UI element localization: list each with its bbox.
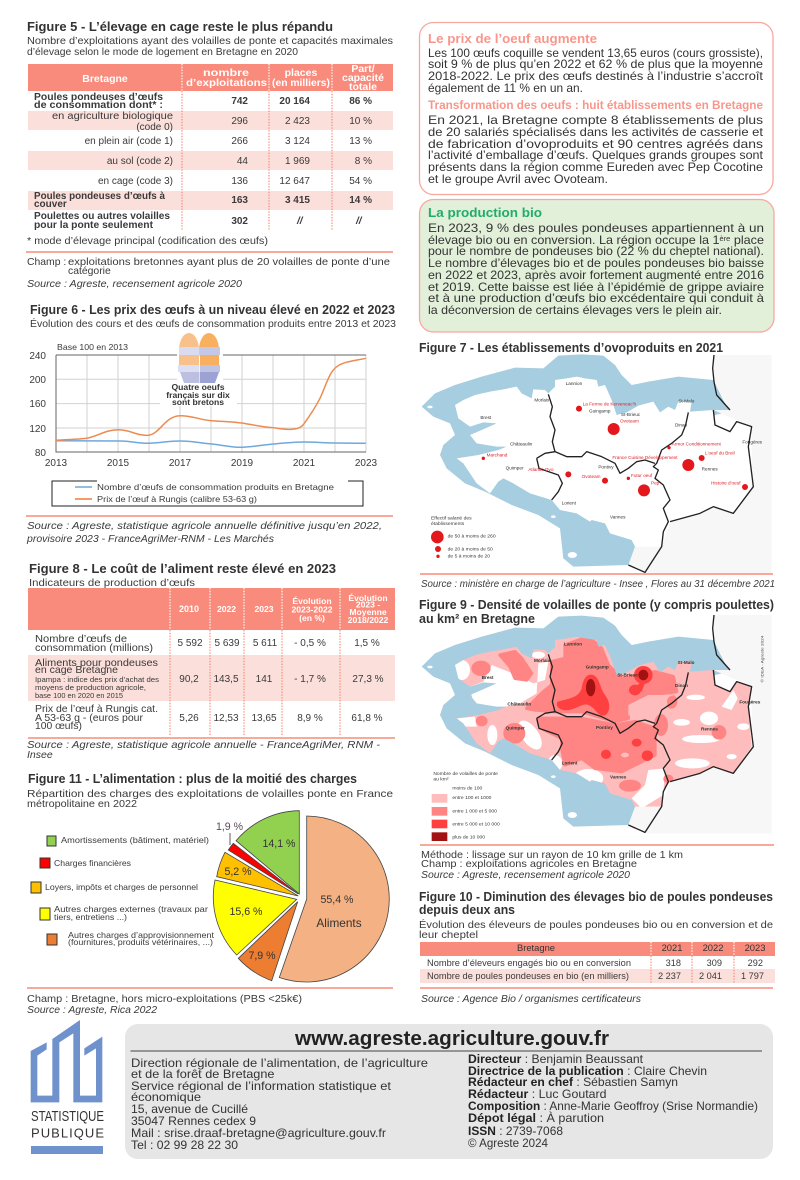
text block: publisher address: Direction régionale de l’alimentation, de l’agriculture xyxy=(131,1056,428,1070)
table: figure 5: Part/ xyxy=(351,63,375,75)
panel: egg price callout xyxy=(420,22,773,194)
table: figure 8: Ipampa : indice des prix d’achat des xyxy=(35,675,159,684)
text block: egg processing: et le groupe Avril avec Ovoteam. xyxy=(428,172,608,186)
credit: © IDEA - Agreste 2024 xyxy=(761,636,765,682)
table: figure 8: (en %) xyxy=(299,613,325,623)
table: figure 5: (code 0) xyxy=(136,122,173,133)
legend: charge categories: Amortissements (bâtiment, matériel) xyxy=(61,835,209,845)
city names: Morlaix xyxy=(534,398,550,403)
pie chart: charge breakdown: 55,4 % xyxy=(321,894,354,906)
line chart: prices and production: 2017 xyxy=(169,458,192,469)
panel: figure 11 xyxy=(27,771,393,1016)
legend: charge categories: Loyers, impôts et charges de personnel xyxy=(45,882,198,892)
text block: organic production: la déconversion de certains élevages vers le plein air. xyxy=(428,303,722,317)
text block: figure 5 source: Champ : xyxy=(27,257,66,268)
line chart: prices and production: 2015 xyxy=(107,458,130,469)
table: figure 5: 86 % xyxy=(349,96,372,107)
table: figure 8: 141 xyxy=(256,674,273,685)
table: figure 8: 8,9 % xyxy=(297,713,323,724)
heading: figure 10 xyxy=(419,889,773,917)
legend: density classes: entre 100 et 1000 xyxy=(452,795,492,801)
text block: egg processing: l’activité d’emballage d’œufs. Quelques grands groupes sont xyxy=(428,148,764,162)
city names: Fougères xyxy=(742,439,763,444)
text block: figure 9 method and source: Champ : exploitations agricoles en Bretagne xyxy=(421,859,637,870)
line chart: prices and production: 240 xyxy=(29,351,46,362)
map: layer hen density xyxy=(422,615,772,841)
table: figure 8: Évolution xyxy=(348,593,388,603)
table: figure 5: Poulettes ou autres volailles xyxy=(34,211,170,222)
panel: organic production callout xyxy=(420,200,774,332)
table: figure 8: 2023 xyxy=(254,604,274,614)
table: figure 5: pour la ponte seulement xyxy=(34,220,154,231)
city names: St-Brieuc xyxy=(621,412,641,417)
legend: density classes: entre 5 000 et 10 000 xyxy=(452,822,500,828)
table: figure 8: 13,65 xyxy=(251,713,277,724)
city names: Lorient xyxy=(562,761,578,766)
panel: figure 8 xyxy=(27,561,395,761)
table: figure 5: 1 969 xyxy=(285,156,310,167)
text block: editorial credits: ISSN : 2739-7068 xyxy=(468,1124,563,1138)
pie chart: charge breakdown: 7,9 % xyxy=(248,950,276,962)
text block: figure 5 subtitle: Nombre d’exploitations ayant des volailles de ponte et capacités maximales xyxy=(27,36,393,47)
table: figure 5: places xyxy=(285,67,317,79)
pie chart: charge breakdown: 5,2 % xyxy=(224,866,252,878)
table: figure 8: 2022 xyxy=(217,604,236,614)
text block: egg price: Les 100 œufs coquille se vendent 13,65 euros (cours grossiste), xyxy=(428,46,763,60)
legend: workforce: de 5 à moins de 20 xyxy=(448,554,490,560)
text block: organic production xyxy=(428,221,764,317)
density areas xyxy=(455,636,752,806)
text block: table footnote: * mode d’élevage principal (codification des œufs) xyxy=(27,236,268,247)
line: eggs produced in Brittany xyxy=(56,441,366,447)
city names: Dinan xyxy=(675,423,688,428)
legend: workforce: de 50 à moins de 260 xyxy=(448,534,496,540)
table: figure 8: 61,8 % xyxy=(351,713,383,724)
table: figure 8: 5 639 xyxy=(214,638,240,649)
table: figure 5: au sol (code 2) xyxy=(107,156,173,167)
table: figure 5: 136 xyxy=(231,176,248,187)
text block: figure 5 subtitle: d’élevage selon le mode de logement en Bretagne en 2020 xyxy=(27,47,298,58)
line chart: prices and production: 2023 xyxy=(355,458,378,469)
logo: Statistique publique xyxy=(31,1020,104,1154)
line chart: prices and production: 80 xyxy=(35,448,46,459)
city names: Dinan xyxy=(675,683,688,688)
table: figure 8: 90,2 xyxy=(179,674,199,685)
table: figure 5: 266 xyxy=(231,136,248,147)
panel: figure 10 xyxy=(419,889,775,1005)
text block: figure 6 subtitle: Évolution des cours et des œufs de consommation produits entre 2013 et 2023 xyxy=(30,317,396,330)
city names: St-Malo xyxy=(678,660,695,665)
table: figure 8: 100 œufs) xyxy=(35,721,82,732)
text block: editorial credits: Dépot légal : À parution xyxy=(468,1111,604,1125)
line chart: prices and production: 120 xyxy=(29,424,46,435)
text block: egg processing: présents dans la région comme Eureden avec Pep Cocotine xyxy=(428,160,763,174)
table: figure 10: 2021 xyxy=(662,942,682,953)
city names: Quimper xyxy=(506,726,525,731)
text block: figure 8 source: Source : Agreste, statistique agricole annuelle - FranceAgriMer, RNM - xyxy=(27,739,381,751)
city names: Morlaix xyxy=(534,658,551,663)
table: figure 5: 742 xyxy=(231,96,248,107)
legend: workforce xyxy=(431,515,496,560)
table: figure 8: Évolution xyxy=(292,596,332,606)
text block: publisher address: Service régional de l’information statistique et xyxy=(131,1079,392,1093)
table: figure 5: 3 415 xyxy=(285,195,310,206)
table: figure 10: 318 xyxy=(666,958,681,968)
pie chart: charge breakdown xyxy=(213,811,389,982)
table: figure 5: 3 124 xyxy=(285,136,310,147)
panel: figure 9 xyxy=(419,597,774,881)
legend: charge categories: Charges financières xyxy=(54,858,131,868)
text block: figure 8 subtitle: Indicateurs de production d’œufs xyxy=(29,578,195,589)
line chart: prices and production: Base 100 en 2013 xyxy=(57,342,128,352)
legend: workforce: établissements xyxy=(431,521,465,527)
city names: Lannion xyxy=(566,381,583,386)
establishment names: Histoire d'oeuf xyxy=(711,480,741,485)
table: figure 5: 10 % xyxy=(349,116,372,127)
text block: organic production: Le nombre d’élevages bio et de poules pondeuses bio baisse xyxy=(428,256,764,270)
text block: organic production: élevage bio ou en conversion. La région occupe la 1 xyxy=(428,233,701,247)
heading: figure 7: Figure 7 - Les établissements d’ovoproduits en 2021 xyxy=(419,340,723,355)
city names: Lorient xyxy=(562,500,577,505)
table: figure 5: 14 % xyxy=(349,195,372,206)
legend: figure 6: Prix de l’œuf à Rungis (calibre 53-63 g) xyxy=(97,494,257,504)
city names: St-Malo xyxy=(678,399,695,404)
text block: organic production: ère xyxy=(720,236,730,243)
table: figure 8: 2018/2022 xyxy=(348,615,389,625)
text block: organic production: et 2019. Cette baisse est liée à l’épidémie de grippe aviaire xyxy=(428,280,764,294)
legend: workforce: de 20 à moins de 50 xyxy=(448,547,493,553)
table: figure 8: 5,26 xyxy=(179,713,199,724)
heading: figure 11: Figure 11 - L’alimentation : plus de la moitié des charges xyxy=(28,771,357,786)
table: figure 8: Moyenne xyxy=(349,607,387,617)
pie chart: charge breakdown: 1,9 % xyxy=(216,821,244,833)
city names xyxy=(482,642,761,780)
legend: charge categories: tiers, entretiens ...) xyxy=(54,912,127,922)
legend: density classes: entre 1 000 et 5 000 xyxy=(452,808,497,814)
text block: figure 5 source xyxy=(27,257,390,290)
text block: figure 9 method and source xyxy=(421,850,683,881)
panel: figure 7 xyxy=(419,340,775,590)
city names: Guingamp xyxy=(586,664,609,669)
table: figure 8: 2023 - xyxy=(356,600,380,610)
table: figure 5: 8 % xyxy=(355,156,372,167)
table: figure 5: 13 % xyxy=(349,136,372,147)
table: figure 10: Nombre d’éleveurs engagés bio ou en conversion xyxy=(427,958,631,968)
legend: charge categories: Autres charges d’approvisionnement xyxy=(68,930,215,940)
table: figure 10: Bretagne xyxy=(517,942,555,953)
line chart: prices and production: 2019 xyxy=(231,458,254,469)
establishment names: Armor Conditionnement xyxy=(672,441,722,446)
table: figure 10: 2023 xyxy=(745,942,765,953)
text block: figure 5 subtitle xyxy=(27,36,393,58)
panel: figure 5 xyxy=(26,19,393,290)
table: figure 5: 296 xyxy=(231,116,248,127)
table: figure 8: 5 611 xyxy=(253,638,278,649)
text block: egg price: 2018-2022. Le prix des œufs destinés à l’industrie s’accroît xyxy=(428,69,764,83)
text block: egg processing: de 20 salariés spécialisés dans les activités de casserie et xyxy=(428,125,764,139)
establishment names: Ovoteam xyxy=(620,419,639,424)
table: figure 5 xyxy=(28,63,393,231)
city names: Rennes xyxy=(701,727,718,732)
city names: Guingamp xyxy=(589,409,611,414)
table: figure 5: en agriculture biologique xyxy=(52,111,173,122)
table: figure 8: 1,5 % xyxy=(354,638,380,649)
heading: figure 9: au km² en Bretagne xyxy=(419,611,535,626)
text block: figure 9 method and source: Source : Agreste, recensement agricole 2020 xyxy=(421,869,630,881)
table: figure 10: 2 237 xyxy=(658,971,681,981)
table: figure 5: 2 423 xyxy=(285,116,310,127)
table: figure 5: totale xyxy=(349,81,377,93)
text block: figure 10 subtitle: leur cheptel xyxy=(419,930,478,941)
establishment dots xyxy=(482,406,748,496)
text block: editorial credits: © Agreste 2024 xyxy=(468,1136,548,1150)
table: figure 10: 1 797 xyxy=(741,971,764,981)
text block: egg price xyxy=(428,46,764,95)
text block: publisher address: 35047 Rennes cedex 9 xyxy=(131,1114,256,1128)
text block: editorial credits: Composition : Anne-Marie Geoffroy (Srise Normandie) xyxy=(468,1099,758,1113)
icon: egg cartons callout: français sur dix xyxy=(166,390,230,400)
table: figure 5: capacité xyxy=(342,72,384,84)
line chart: prices and production: 200 xyxy=(29,375,46,386)
text block: figure 5 source: Source : Agreste, recensement agricole 2020 xyxy=(27,278,242,290)
text block: organic production: en 2022 et 2023, après avoir fortement augmenté entre 2016 xyxy=(428,268,764,282)
establishment names: Marchand xyxy=(487,452,508,457)
text block: figure 6 source xyxy=(26,520,382,545)
table: figure 5: // xyxy=(296,216,304,227)
text block: editorial credits: Directrice de la publication : Claire Chevin xyxy=(468,1064,707,1078)
heading: figure 10: depuis deux ans xyxy=(419,902,515,917)
city names: Brest xyxy=(480,415,492,420)
table: figure 5: 12 647 xyxy=(279,176,310,187)
line chart: prices and production: 2013 xyxy=(45,458,68,469)
table: figure 8: Prix de l’œuf à Rungis cat. xyxy=(35,704,158,715)
table: figure 5: Poules pondeuses d’œufs xyxy=(34,92,163,103)
table: figure 5: Bretagne xyxy=(82,73,128,85)
establishment names: Ovoteam xyxy=(582,474,601,479)
table: figure 8: 2010 xyxy=(179,604,199,614)
legend: charge categories xyxy=(31,835,215,947)
text block: publisher address: Tel : 02 99 28 22 30 xyxy=(131,1138,238,1152)
text block: organic production: place xyxy=(730,233,764,247)
text block: figure 6 source: Source : Agreste, statistique agricole annuelle définitive jusqu’en 2022, xyxy=(27,520,382,532)
table: figure 8: base 100 en 2020 en 2015 xyxy=(35,691,123,700)
establishment names: Pep xyxy=(651,480,660,485)
text block: figure 6 source: provisoire 2023 - FranceAgriMer-RNM - Les Marchés xyxy=(26,533,275,545)
table: figure 5: nombre xyxy=(203,67,249,79)
text block: editorial credits: Directeur : Benjamin Beaussant xyxy=(468,1052,644,1066)
heading: egg price: Le prix de l’oeuf augmente xyxy=(428,32,597,46)
table: figure 8: 143,5 xyxy=(213,674,239,685)
table: figure 5: d’exploitations xyxy=(186,77,267,89)
text block: editorial credits: Rédacteur en chef : Sébastien Samyn xyxy=(468,1075,678,1089)
table: figure 5: couver xyxy=(34,199,67,210)
panel: figure 6 xyxy=(26,302,396,545)
text block: figure 11 subtitle xyxy=(27,789,393,810)
table: figure 10 xyxy=(420,942,775,984)
text block: egg processing: En 2021, la Bretagne compte 8 établissements de plus xyxy=(428,113,763,127)
pie chart: charge breakdown: Aliments xyxy=(316,916,362,930)
legend: density classes: moins de 100 xyxy=(452,785,482,791)
text block: figure 8 source: Insee xyxy=(27,749,53,761)
establishment names xyxy=(487,402,741,485)
icon: egg cartons callout xyxy=(160,333,237,407)
city names: Brest xyxy=(482,675,494,680)
text block: egg price: également de 11 % en un an. xyxy=(428,81,583,95)
text block: egg price: soit 9 % de plus qu’en 2022 et 62 % de plus que la moyenne xyxy=(428,57,763,71)
legend: density classes: au km² xyxy=(433,776,449,782)
heading: figure 8: Figure 8 - Le coût de l’aliment reste élevé en 2023 xyxy=(29,561,336,576)
text block: organic production: En 2023, 9 % des poules pondeuses appartiennent à un xyxy=(428,221,764,235)
text block: figure 9 method and source: Méthode : lissage sur un rayon de 10 km grille de 1 km xyxy=(421,850,683,861)
text block: figure 7 source: Source : ministère en charge de l’agriculture - Insee , Flores au 31 décembre 2021 xyxy=(421,578,775,590)
logo: Statistique publique: PUBLIQUE xyxy=(31,1126,104,1140)
table: figure 5: 54 % xyxy=(349,176,372,187)
pie chart: charge breakdown: 15,6 % xyxy=(230,906,263,918)
establishment names: Futur oeuf xyxy=(631,473,653,478)
panel: footer imprint xyxy=(125,1024,773,1159)
text block: figure 10 subtitle xyxy=(419,918,773,941)
legend: charge categories: Autres charges externes (travaux par xyxy=(54,904,208,914)
table: figure 8: 5 592 xyxy=(177,638,203,649)
legend: figure 6 xyxy=(52,481,363,506)
table: figure 5: 163 xyxy=(231,195,248,206)
text block: publisher address: Mail : srise.draaf-bretagne@agriculture.gouv.fr xyxy=(131,1126,386,1140)
city names: Pontivy xyxy=(596,725,613,730)
legend: density classes: Nombre de volailles de ponte xyxy=(433,771,498,777)
heading: organic production: La production bio xyxy=(428,206,542,220)
legend: density classes xyxy=(432,771,500,841)
table: figure 10: 292 xyxy=(748,958,763,968)
table: figure 8: - 0,5 % xyxy=(294,638,326,649)
table: figure 10: 309 xyxy=(707,958,722,968)
city names: Vannes xyxy=(610,775,627,780)
table: figure 5: de consommation dont* : xyxy=(34,100,163,111)
table: figure 8: 2023-2022 xyxy=(291,604,333,614)
heading: figure 9 xyxy=(419,597,774,626)
table: figure 8: - 1,7 % xyxy=(294,674,326,685)
table: figure 8: Nombre d’œufs de xyxy=(35,634,127,645)
city names: Châteaulin xyxy=(507,702,531,707)
logo: Statistique publique: STATISTIQUE xyxy=(31,1108,104,1125)
text block: egg processing xyxy=(428,113,764,186)
text block: figure 11 source xyxy=(27,994,302,1016)
heading: figure 6: Figure 6 - Les prix des œufs à un niveau élevé en 2022 et 2023 xyxy=(30,302,395,317)
text block: figure 11 source: Champ : Bretagne, hors micro-exploitations (PBS <25k€) xyxy=(27,994,302,1005)
table: figure 5: (en milliers) xyxy=(272,77,330,89)
text block: organic production: pour le nombre de pondeuses bio (22 % du cheptel national). xyxy=(428,244,764,258)
table: figure 10: 2022 xyxy=(703,942,723,953)
map: egg product plants xyxy=(422,354,772,573)
heading: figure 10: Figure 10 - Diminution des élevages bio de poules pondeuses xyxy=(419,889,773,904)
table: figure 8: moyens de production agricole, xyxy=(35,683,146,692)
line chart: prices and production: 160 xyxy=(29,399,46,410)
table: figure 8: consommation (millions) xyxy=(35,643,153,654)
text block: publisher address: économique xyxy=(131,1090,201,1104)
line: Rungis egg price xyxy=(56,358,366,440)
text block: egg processing: de fabrication d’ovoproduits et 90 centres agréés dans xyxy=(428,137,763,151)
table: figure 8: A 53-63 g - (euros pour xyxy=(35,713,144,724)
text block: publisher address: et de la forêt de Bretagne xyxy=(131,1067,275,1081)
table: figure 8: 27,3 % xyxy=(352,674,384,685)
establishment names: France Cuisine Développement xyxy=(612,455,678,460)
table: figure 5: Poules pondeuses d’œufs à xyxy=(34,191,165,202)
city names: Fougères xyxy=(739,700,761,705)
legend: figure 6: Nombre d’œufs de consommation produits en Bretagne xyxy=(97,482,334,492)
text block: publisher address xyxy=(131,1056,428,1152)
table: figure 5: en plein air (code 1) xyxy=(85,136,173,147)
legend: density classes: plus de 10 000 xyxy=(452,834,485,840)
table: figure 5: en cage (code 3) xyxy=(98,176,173,187)
text block: figure 11 source: Source : Agreste, Rica 2022 xyxy=(27,1004,157,1016)
table: figure 8: 12,53 xyxy=(213,713,239,724)
table: figure 8: en cage Bretagne xyxy=(35,665,118,676)
pie chart: charge breakdown: 14,1 % xyxy=(263,838,296,850)
city names: Quimper xyxy=(506,465,524,470)
text block: figure 11 subtitle: métropolitaine en 2022 xyxy=(27,799,137,810)
establishment names: L'oeuf du Breil xyxy=(705,451,735,456)
text block: figure 11 subtitle: Répartition des charges des exploitations de volailles ponte en France xyxy=(27,789,393,800)
table: figure 10: Nombre de poules pondeuses en bio (en milliers) xyxy=(427,971,629,981)
table: figure 8 xyxy=(28,588,395,735)
line chart: prices and production: 2021 xyxy=(293,458,316,469)
text block: figure 5 source: catégorie xyxy=(68,266,111,277)
legend: charge categories: (fournitures, produits vétérinaires, ...) xyxy=(68,937,213,947)
table: figure 5: // xyxy=(355,216,363,227)
table: figure 5: 44 xyxy=(237,156,248,167)
text block: figure 5 source: exploitations bretonnes ayant plus de 20 volailles de ponte d’une xyxy=(68,257,390,268)
heading: figure 5: Figure 5 - L’élevage en cage reste le plus répandu xyxy=(27,19,333,34)
text block: editorial credits xyxy=(468,1052,758,1150)
text block: organic production: et à une production d’œufs bio excédentaire qui conduit à xyxy=(428,291,764,305)
heading: figure 9: Figure 9 - Densité de volailles de ponte (y compris poulettes) xyxy=(419,597,774,612)
table: figure 10: 2 041 xyxy=(699,971,722,981)
establishment names: Atlantic Ovo xyxy=(528,467,554,472)
city names: Châteaulin xyxy=(510,441,533,446)
text block: figure 10 subtitle: Évolution des éleveurs de poules pondeuses bio ou en conversion et de xyxy=(419,918,773,931)
text block: figure 10 source: Source : Agence Bio / organismes certificateurs xyxy=(421,993,642,1005)
heading: website: www.agreste.agriculture.gouv.fr xyxy=(294,1027,609,1050)
heading: egg processing: Transformation des oeufs : huit établissements en Bretagne xyxy=(428,98,763,112)
line chart: prices and production xyxy=(29,333,378,506)
text block: figure 8 source xyxy=(27,739,381,761)
establishment names: La Ferme de Kerveneac'h xyxy=(583,402,637,407)
legend: workforce: Effectif salarié des xyxy=(431,515,472,521)
city names: St-Brieuc xyxy=(617,673,638,678)
icon: egg cartons callout: sont bretons xyxy=(172,397,224,407)
icon: egg cartons callout: Quatre oeufs xyxy=(171,382,225,392)
city names: Pontivy xyxy=(598,465,614,470)
table: figure 5: 302 xyxy=(231,216,248,227)
city names xyxy=(480,381,763,519)
table: figure 8: Aliments pour pondeuses xyxy=(35,658,158,669)
city names: Rennes xyxy=(702,466,718,471)
text block: publisher address: 15, avenue de Cucillé xyxy=(131,1102,248,1116)
city names: Lannion xyxy=(564,642,582,647)
text block: editorial credits: Rédacteur : Luc Goutard xyxy=(468,1087,606,1101)
table: figure 5: 20 164 xyxy=(279,96,310,107)
city names: Vannes xyxy=(610,514,626,519)
